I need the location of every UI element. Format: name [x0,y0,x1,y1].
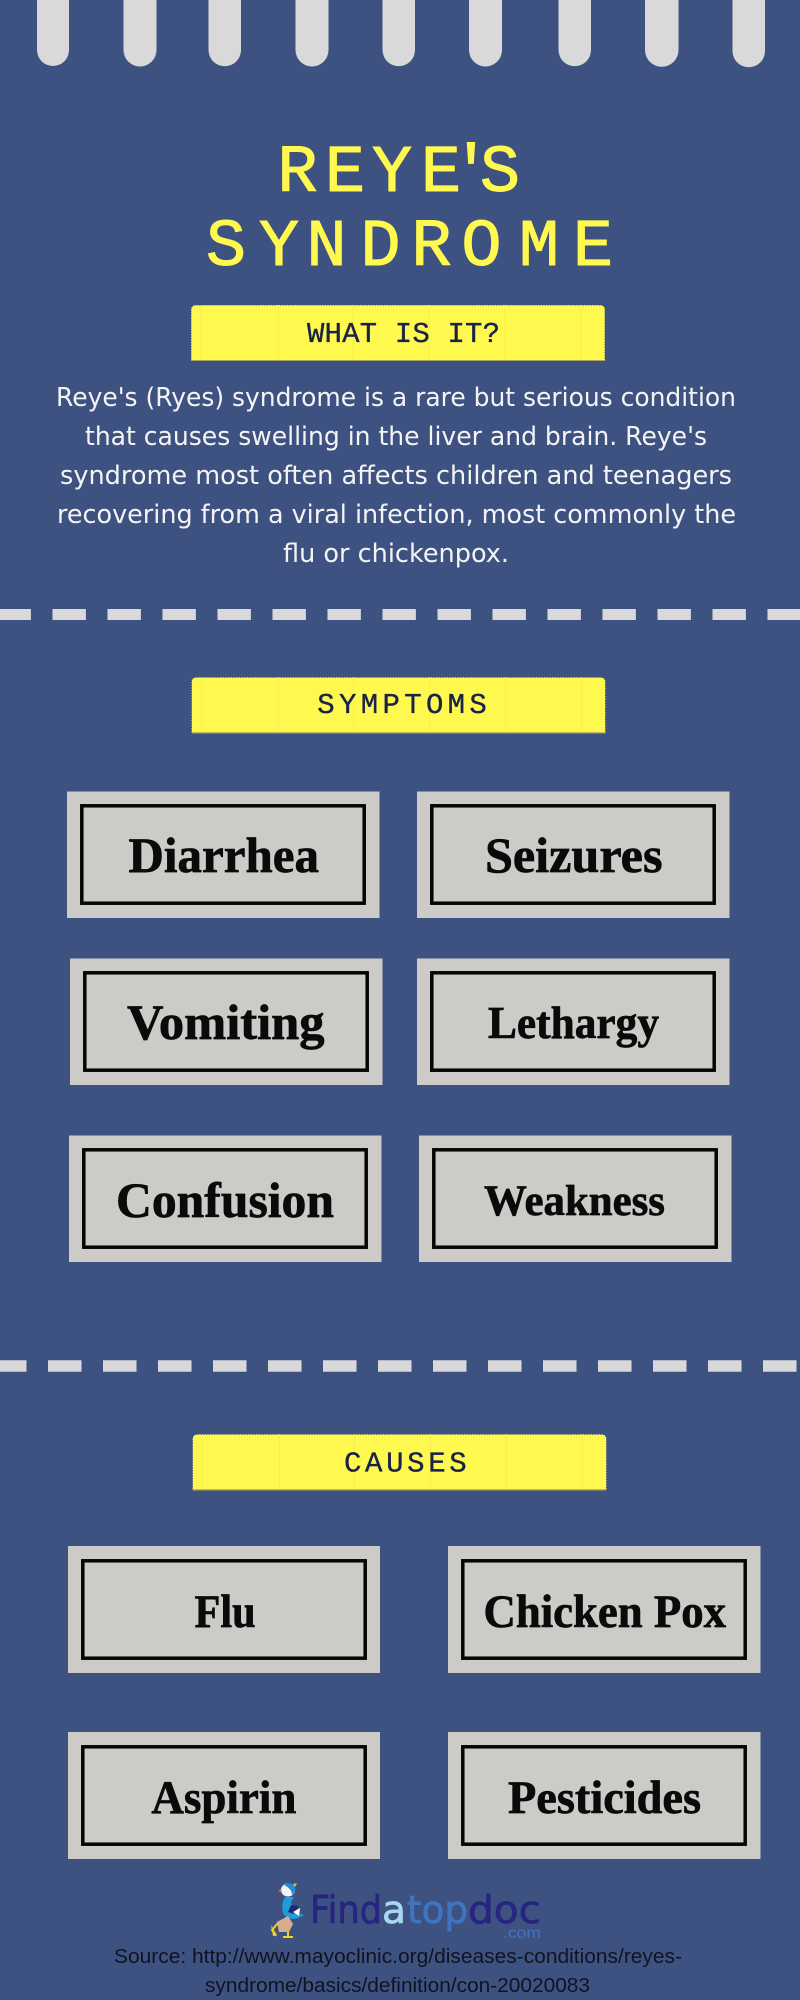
symptom: lethargy [417,958,730,1085]
heading: what is it [191,305,605,361]
symptom: confusion: Confusion [116,1172,334,1228]
heading: symptoms [192,677,606,733]
cause: aspirin: Aspirin [151,1772,296,1824]
symptom: confusion [69,1136,382,1262]
decorative tabs along top edge [37,0,765,67]
cause: flu [68,1546,380,1673]
cause: flu: Flu [194,1586,256,1638]
symptom: vomiting: Vomiting [127,994,324,1050]
icon: limping bird mascot [271,1883,304,1938]
heading: causes [192,1434,606,1490]
heading: causes: CAUSES [344,1447,467,1480]
symptom: seizures: Seizures [485,827,662,883]
description text block: syndrome most often affects children and teenagers [60,461,732,491]
cause: pesticides: Pesticides [508,1772,701,1824]
symptom: vomiting [70,958,382,1085]
title [206,136,613,286]
logo: Findatopdoc.com: top [407,1888,468,1932]
logo: Findatopdoc.com: .com [503,1925,541,1942]
logo: Findatopdoc.com: a [382,1888,406,1932]
logo: Findatopdoc.com: Find [310,1888,382,1932]
logo: Findatopdoc.com [310,1888,541,1942]
source citation [114,1946,682,1997]
symptom: weakness [419,1136,732,1262]
logo: Findatopdoc.com: doc [468,1888,541,1932]
description text block: flu or chickenpox. [283,539,509,569]
title: SYNDROME [206,210,613,286]
description text block: that causes swelling in the liver and brain. Reye's [85,422,707,452]
description text block: recovering from a viral infection, most commonly the [57,500,736,530]
symptom: seizures [417,792,730,918]
description text block [56,383,736,569]
title: REYE'S [277,136,520,212]
source citation: Source: http://www.mayoclinic.org/diseases-conditions/reyes- [114,1946,682,1968]
cause: pesticides [448,1732,760,1859]
heading: what is it: WHAT IS IT? [307,318,500,351]
source citation: syndrome/basics/definition/con-20020083 [205,1975,590,1997]
heading: symptoms: SYMPTOMS [317,689,487,722]
symptom: weakness: Weakness [484,1178,665,1225]
cause: chicken pox: Chicken Pox [484,1586,726,1638]
cause: aspirin [68,1732,380,1859]
description text block: Reye's (Ryes) syndrome is a rare but serious condition [56,383,736,413]
symptom: diarrhea [67,792,380,918]
symptom: lethargy: Lethargy [488,997,659,1048]
symptom: diarrhea: Diarrhea [128,827,319,883]
cause: chicken pox [448,1546,760,1673]
